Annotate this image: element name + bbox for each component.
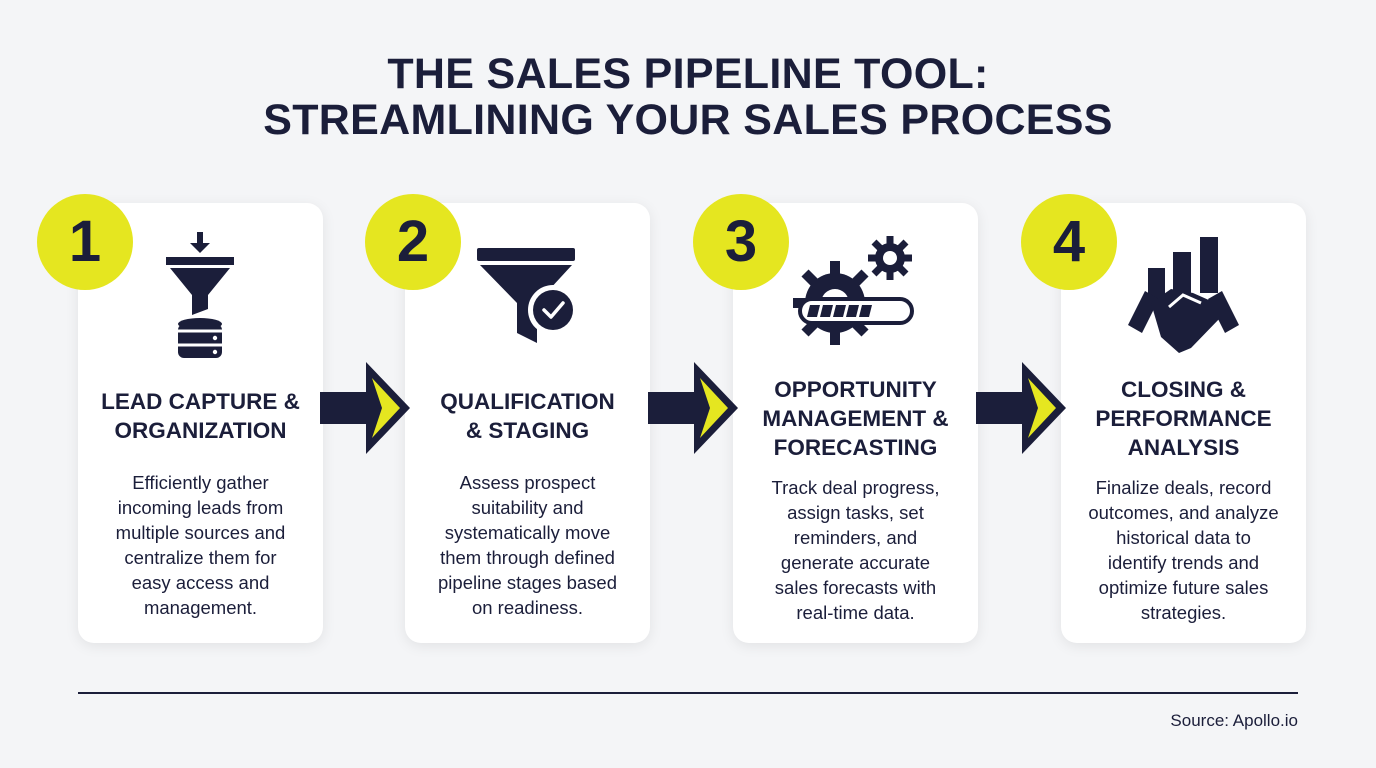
title: STREAMLINING YOUR SALES PROCESS (263, 96, 1113, 144)
panel: step 2 (405, 203, 650, 643)
heading 4: CLOSING & (1121, 377, 1246, 402)
text 4: Finalize deals, record outcomes, and analyze historical data to identify trends and optimize future sales strategies. (1088, 477, 1279, 623)
badge 3: 3 (725, 209, 757, 274)
icon: handshake with bars (1128, 237, 1239, 353)
badge 4: 4 (1053, 209, 1085, 274)
arrow 3 (976, 362, 1066, 454)
heading 4: ANALYSIS (1128, 435, 1239, 460)
badge 4 (1021, 194, 1117, 290)
heading 3: OPPORTUNITY (774, 377, 937, 402)
badge 2 (365, 194, 461, 290)
source: Source: Apollo.io (1170, 711, 1298, 730)
badge 1: 1 (69, 209, 101, 274)
heading 4: PERFORMANCE (1095, 406, 1272, 431)
text 1: Efficiently gather incoming leads from multiple sources and centralize them for easy access and management. (116, 472, 285, 618)
heading 3 (762, 377, 949, 460)
title: THE SALES PIPELINE TOOL: (387, 50, 989, 98)
heading 1 (101, 389, 300, 443)
heading 4 (1095, 377, 1272, 460)
panel: step 4 (1061, 203, 1306, 643)
heading 2 (440, 389, 615, 443)
panel: step 3 (733, 203, 978, 643)
heading 1: LEAD CAPTURE & (101, 389, 300, 414)
heading 2: QUALIFICATION (440, 389, 615, 414)
text 2: Assess prospect suitability and systematically move them through defined pipeline stages based on readiness. (438, 472, 617, 618)
heading 3: MANAGEMENT & (762, 406, 949, 431)
heading 1: ORGANIZATION (114, 418, 287, 443)
heading 2: & STAGING (466, 418, 589, 443)
panel: step 1 (78, 203, 323, 643)
text 3: Track deal progress, assign tasks, set reminders, and generate accurate sales forecasts with real-time data. (772, 477, 939, 623)
badge 1 (37, 194, 133, 290)
arrow 2 (648, 362, 738, 454)
icon: funnel with database (166, 232, 234, 358)
title (263, 50, 1113, 144)
badge 2: 2 (397, 209, 429, 274)
badge 3 (693, 194, 789, 290)
icon: funnel with check (477, 248, 575, 343)
heading 3: FORECASTING (774, 435, 937, 460)
icon: gears with progress bar (793, 236, 914, 345)
arrow 1 (320, 362, 410, 454)
